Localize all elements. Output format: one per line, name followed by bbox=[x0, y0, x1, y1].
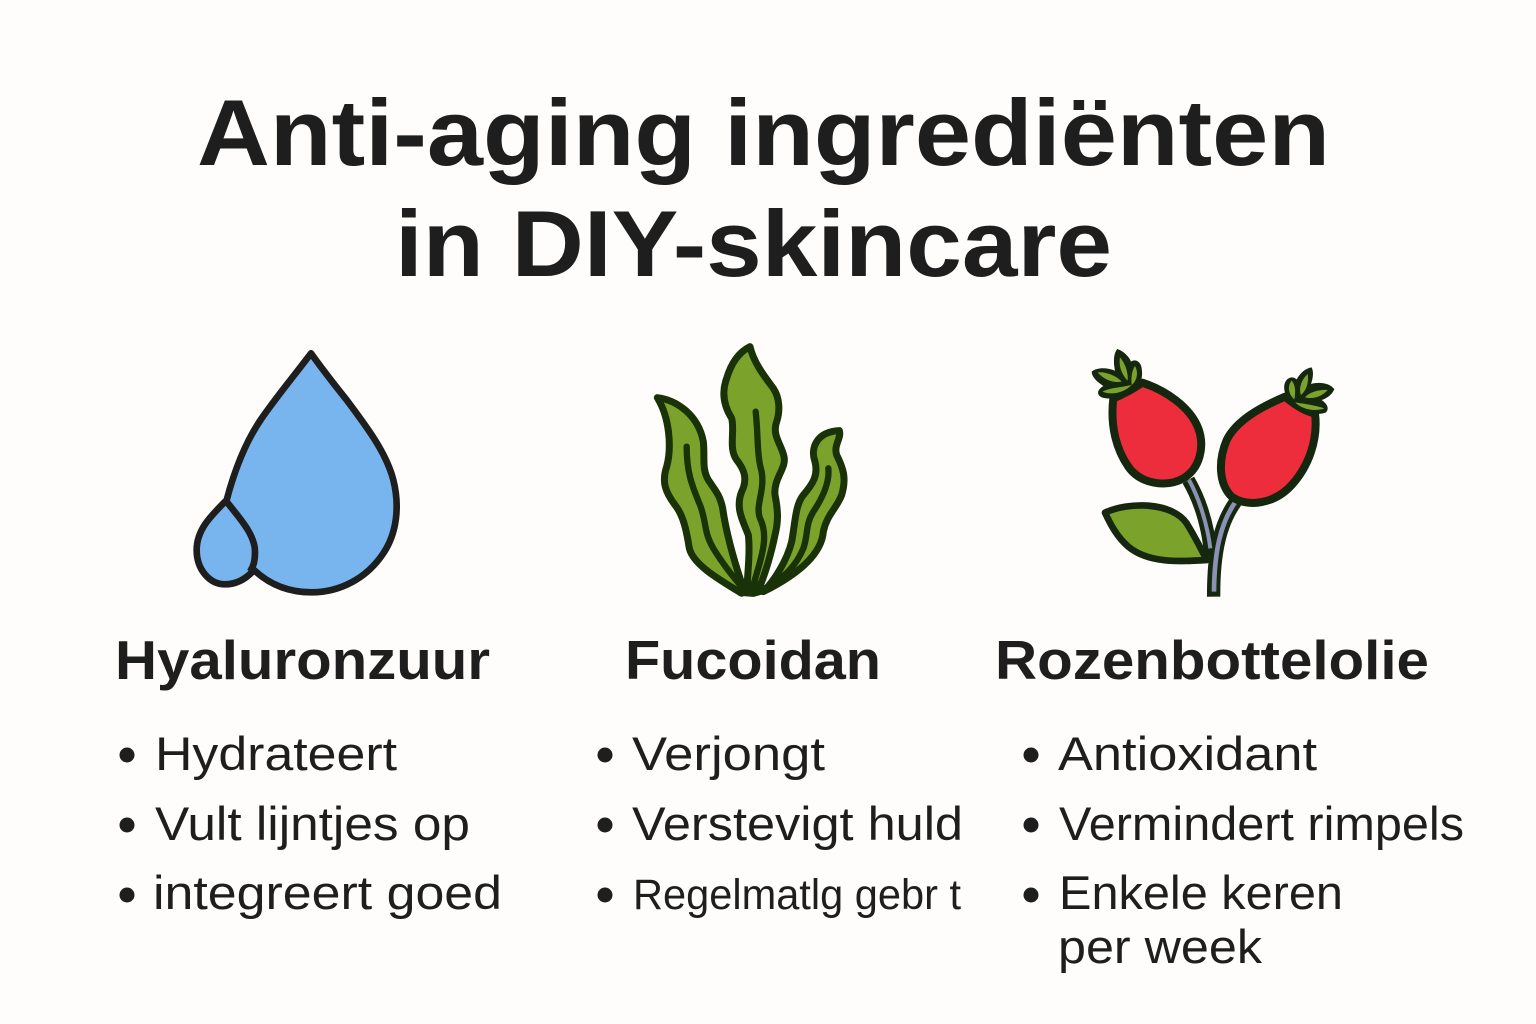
bullet list: Antioxidant bbox=[1058, 727, 1317, 780]
icon: rose hips bbox=[1092, 349, 1334, 597]
icon: seaweed bbox=[657, 347, 844, 593]
bullet list: Vult lijntjes op bbox=[155, 797, 470, 850]
title: Anti-aging ingrediënten bbox=[197, 80, 1330, 185]
column: Rozenbottelolie bbox=[995, 349, 1464, 973]
bullet list: per week bbox=[1058, 920, 1263, 973]
bullet list bbox=[120, 727, 502, 919]
bullet list: Verjongt bbox=[632, 727, 825, 780]
bullet list: Regelmatlg gebr t bbox=[633, 871, 961, 919]
sepals: right hip bbox=[1284, 367, 1334, 414]
bullet list: Vermindert rimpels bbox=[1059, 797, 1464, 850]
title bbox=[197, 80, 1330, 296]
bullet list: Hydrateert bbox=[155, 727, 397, 780]
column: Fucoidan bbox=[598, 347, 963, 919]
bullet list: Verstevigt huld bbox=[632, 797, 963, 850]
sepals: left hip bbox=[1092, 349, 1142, 399]
bullet list: Enkele keren bbox=[1059, 866, 1343, 919]
bullet list: integreert goed bbox=[153, 866, 502, 919]
title: in DIY-skincare bbox=[395, 191, 1112, 296]
heading: Rozenbottelolie bbox=[995, 629, 1429, 691]
heading: Fucoidan bbox=[625, 629, 881, 691]
heading: Hyaluronzuur bbox=[115, 629, 490, 691]
column: Hyaluronzuur bbox=[115, 353, 502, 919]
bullet list bbox=[598, 727, 963, 919]
bullet list bbox=[1024, 727, 1464, 973]
icon: water drops bbox=[197, 353, 397, 592]
